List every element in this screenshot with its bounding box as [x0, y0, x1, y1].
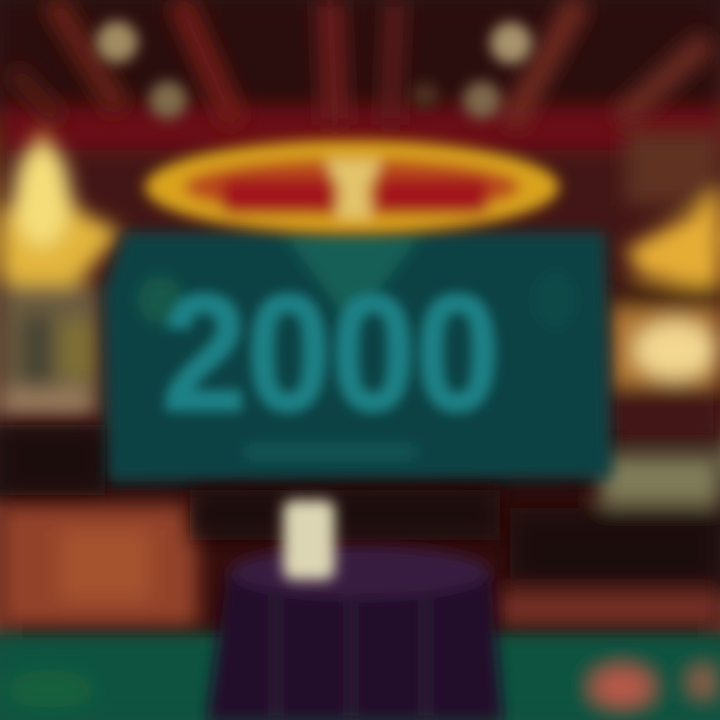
left chandelier: [0, 125, 122, 418]
green table bottom: [0, 637, 720, 720]
left dark lower wall: [0, 425, 105, 495]
subtitle bar: [245, 446, 415, 458]
purple round table: [207, 546, 503, 720]
oval marquee: [145, 140, 559, 234]
right chandelier and bar: [500, 130, 720, 626]
panel: teal sign board: [104, 232, 612, 482]
carpet left: [0, 505, 198, 627]
title: 2000: 2000: [162, 261, 500, 446]
ceiling beams: [12, 0, 708, 125]
white card on table: [283, 500, 335, 580]
ceiling lights: [96, 21, 532, 119]
sign base: [190, 490, 500, 540]
